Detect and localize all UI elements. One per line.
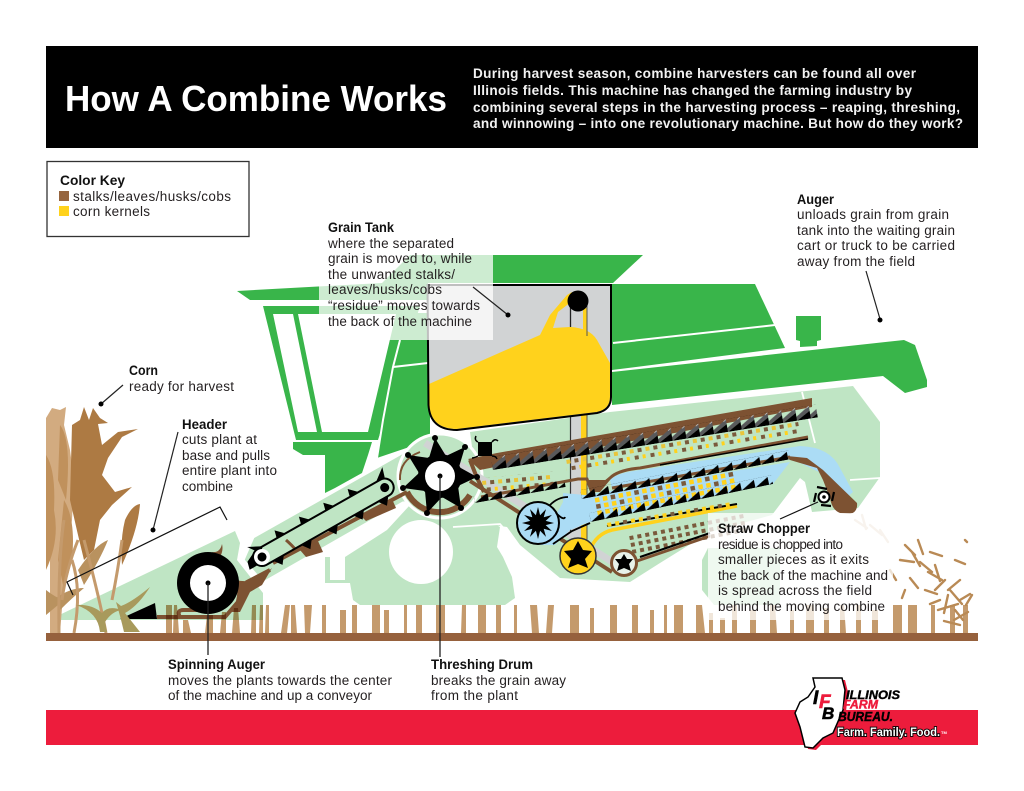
light green front wheel <box>325 505 515 605</box>
brown crop feed <box>157 492 407 617</box>
title banner <box>46 46 978 148</box>
icon: Illinois state outline: F <box>819 692 832 713</box>
callout: header: entire plant into <box>182 463 277 478</box>
straw chopper icon <box>814 487 834 506</box>
callout: straw chopper <box>718 502 888 614</box>
corn plants <box>46 407 150 633</box>
callout: straw chopper: residue is chopped into <box>718 537 843 552</box>
callout: grain tank: “residue” moves towards <box>328 298 480 313</box>
small beater icon <box>472 436 498 459</box>
callout: auger: away from the field <box>797 254 915 269</box>
chopped straw spray <box>855 515 972 625</box>
intro text: combining several steps in the harvesting process – reaping, threshing, <box>473 100 960 115</box>
logo wordmark: ILLINOIS <box>846 688 900 702</box>
color key legend <box>47 162 249 236</box>
callout: threshing drum <box>431 476 566 703</box>
logo wordmark: TM <box>941 730 947 735</box>
middle tray <box>481 437 808 497</box>
callout: auger <box>797 192 955 322</box>
callout: header: cuts plant at <box>182 432 257 447</box>
yellow line tray <box>590 506 737 550</box>
logo wordmark: FARM <box>843 700 878 712</box>
color key legend: corn kernels <box>73 204 150 219</box>
feeder conveyor <box>238 467 401 580</box>
combine green body <box>237 255 927 493</box>
callout: threshing drum: Threshing Drum <box>431 657 533 672</box>
panel: grain tank caption backdrop <box>319 255 493 340</box>
light green rear wheel <box>702 548 780 605</box>
callout: header <box>67 417 277 595</box>
logo wordmark: BUREAU. <box>838 710 893 724</box>
color key legend: stalks/leaves/husks/cobs <box>73 189 231 204</box>
spinning auger wheel <box>177 552 239 614</box>
light green body <box>453 386 880 582</box>
callout: straw chopper: is spread across the field <box>718 583 872 598</box>
intro text: Illinois fields. This machine has changed the farming industry by <box>473 83 912 98</box>
callout: grain tank: the back of the machine <box>328 314 472 329</box>
callout: straw chopper: Straw Chopper <box>718 521 811 536</box>
callout: straw chopper: the back of the machine and <box>718 568 888 583</box>
callout: grain tank: where the separated <box>327 236 454 251</box>
callout: header: combine <box>182 479 233 494</box>
discharge chute <box>787 456 857 514</box>
callout: grain tank: Grain Tank <box>328 220 394 235</box>
front wheel hub <box>389 520 453 584</box>
yellow roller <box>560 538 596 574</box>
callout: straw chopper: smaller pieces as it exits <box>718 552 869 567</box>
intro text <box>473 66 963 131</box>
callout: corn: ready for harvest <box>129 379 234 394</box>
icon: Illinois state outline <box>795 678 848 750</box>
logo wordmark: Farm. Family. Food. <box>837 727 940 739</box>
Illinois Farm Bureau logo <box>795 678 947 750</box>
callout: corn <box>98 363 234 406</box>
callout: grain tank: grain is moved to, while <box>328 251 472 266</box>
tank column <box>570 400 587 565</box>
callout: spinning auger <box>168 583 392 703</box>
drum housing <box>398 434 482 518</box>
blue air stream <box>540 446 853 545</box>
header cutter tip <box>120 603 157 619</box>
icon: Illinois state outline: B <box>822 704 834 723</box>
callout: threshing drum: from the plant <box>431 688 518 703</box>
callout: auger: unloads grain from grain <box>797 207 949 222</box>
callout: spinning auger: moves the plants towards the center <box>168 673 392 688</box>
combine harvester illustration <box>53 255 927 620</box>
panel: straw chopper caption backdrop <box>708 513 893 620</box>
callout: spinning auger: of the machine and up a conveyor <box>168 688 372 703</box>
icon: Illinois state outline: I <box>813 688 819 709</box>
callout: header: Header <box>182 417 228 432</box>
conveyor housing <box>243 440 470 583</box>
top straw walker <box>468 398 818 492</box>
callout: grain tank: the unwanted stalks/ <box>328 267 455 282</box>
callout: auger: cart or truck to be carried <box>797 238 955 253</box>
diagonal return conveyor <box>425 443 625 572</box>
logo wordmark <box>837 688 947 739</box>
callout: grain tank <box>327 220 510 329</box>
callout: auger: Auger <box>797 192 835 207</box>
callout: spinning auger: Spinning Auger <box>168 657 266 672</box>
callout: threshing drum: breaks the grain away <box>431 673 566 688</box>
callout: straw chopper: behind the moving combine <box>718 599 885 614</box>
footer red band <box>46 710 978 745</box>
callout: grain tank: leaves/husks/cobs <box>328 282 442 297</box>
intro text: During harvest season, combine harvesters can be found all over <box>473 66 917 81</box>
cleaning fan <box>517 497 568 544</box>
color key legend: Color Key <box>60 173 125 188</box>
callout: header: base and pulls <box>182 448 270 463</box>
callout: auger: tank into the waiting grain <box>797 223 955 238</box>
grain dot bands <box>481 419 800 556</box>
grain tank <box>428 285 611 430</box>
ground and stubble <box>46 605 978 641</box>
callout: corn: Corn <box>129 363 158 378</box>
intro text: and winnowing – into one revolutionary machine. But how do they work? <box>473 116 963 131</box>
threshing drum <box>400 435 480 516</box>
header light green <box>53 531 263 620</box>
saw tooth sieves <box>474 439 808 561</box>
title: How A Combine Works <box>65 78 447 119</box>
small brown roller <box>612 550 636 576</box>
